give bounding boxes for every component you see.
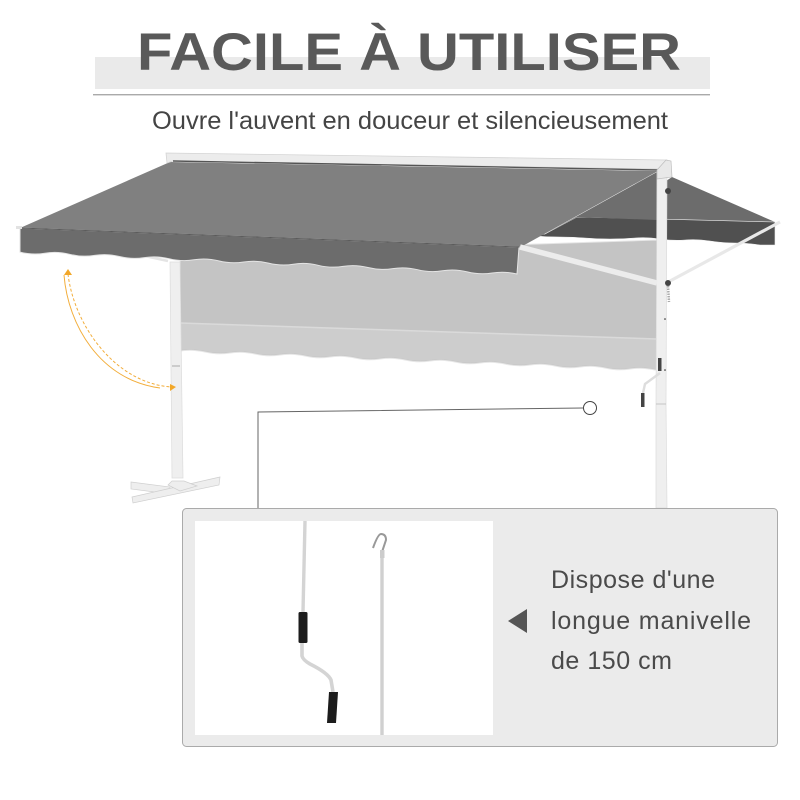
left arm stub: [140, 255, 168, 261]
left folding arm: [520, 247, 657, 283]
orange motion arrow: [64, 269, 176, 391]
title: FACILE À UTILISER: [137, 22, 681, 82]
main valance: [20, 228, 519, 274]
right wing canopy: [610, 177, 775, 223]
top bracket: [657, 160, 672, 179]
back curtain: [180, 240, 657, 370]
cross base: [131, 477, 220, 503]
right pole: [656, 172, 667, 508]
spring chain: [668, 286, 669, 302]
right folding arm: [670, 222, 780, 281]
inner shaded canopy: [545, 172, 657, 234]
hook pole: [373, 534, 386, 735]
title band: [93, 57, 710, 95]
panel caption: de 150 cm: [551, 647, 672, 675]
right wing valance: [535, 217, 775, 245]
left arm tip: [16, 226, 22, 229]
left pole: [170, 262, 183, 478]
panel: crank detail: [182, 508, 778, 746]
roller bar: [166, 153, 667, 170]
panel caption: longue manivelle: [551, 607, 751, 635]
pole knobs: [665, 188, 671, 286]
main canopy: [20, 162, 658, 248]
crank on pole: [641, 358, 662, 407]
crank photo: [195, 521, 493, 735]
panel caption: [551, 566, 751, 675]
crank rod and handles: [298, 521, 338, 723]
panel caption: Dispose d'une: [551, 566, 715, 594]
subtitle: Ouvre l'auvent en douceur et silencieusement: [152, 107, 668, 135]
callout leader line: [258, 402, 596, 508]
awning illustration: [16, 153, 780, 508]
pointer triangle: [508, 609, 527, 633]
